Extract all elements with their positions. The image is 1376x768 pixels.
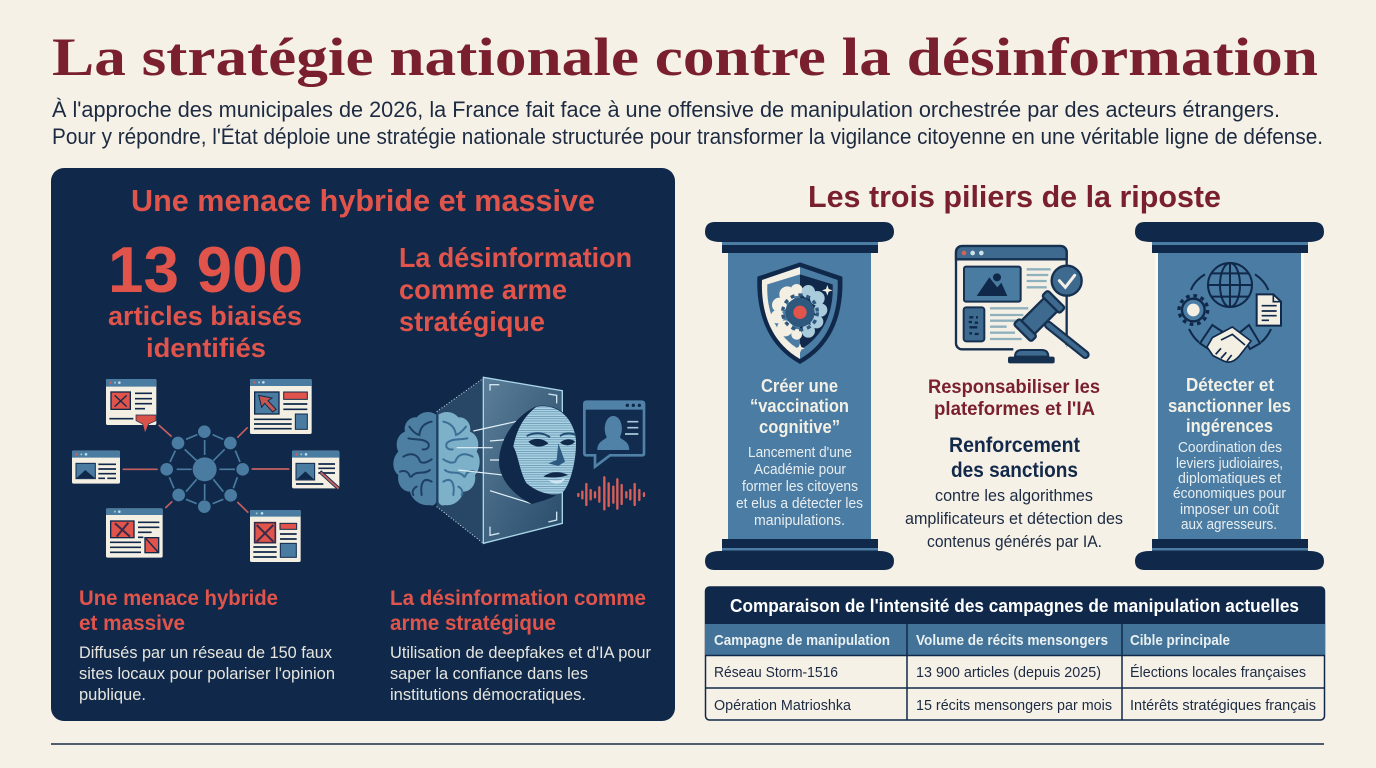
text: arme stratégique: arme stratégique [390, 612, 556, 635]
pillar 3 text: imposer un coût [1180, 501, 1280, 518]
comparison table [705, 587, 1325, 720]
subheading: arme stratégique [399, 242, 632, 337]
key figure: 13 900 articles [108, 233, 303, 363]
title: La stratégie nationale contre la désinformation [52, 27, 1318, 87]
text: arme stratégique: La désinformation comme [390, 587, 646, 610]
table header row: Campagne de manipulation [714, 632, 890, 649]
window D [292, 451, 339, 489]
pillar 3 text: diplomatiques et [1178, 470, 1282, 487]
panel heading: Une menace hybride et massive [131, 183, 595, 218]
pillar 2 emphasis: des sanctions [951, 459, 1078, 482]
pillar 1: vaccination cognitive [705, 222, 894, 570]
table title: Comparaison de l'intensité des campagnes de manipulation actuelles [730, 595, 1299, 616]
pillar 2 heading [928, 377, 1100, 420]
icon: globe gear document handshake [1179, 263, 1281, 362]
pillar 2 text: contenus générés par IA. [927, 532, 1102, 551]
text: arme stratégique: saper la confiance dans les [390, 664, 588, 683]
pillar 3 text: Détecter et [1186, 375, 1274, 395]
table row: Storm-1516: 13 900 articles (depuis 2025) [916, 664, 1101, 681]
table row: Matrioshka: 15 récits mensongers par mois [916, 697, 1112, 714]
pillar 3 text: ingérences [1186, 416, 1273, 436]
text: menace hybride: Une menace hybride [79, 587, 278, 610]
pillar 2: responsabiliser [905, 246, 1123, 551]
pillar 3 text: économiques pour [1173, 485, 1286, 502]
text: arme stratégique: institutions démocratiques. [390, 685, 586, 704]
icon: deepfake brain and face [393, 377, 644, 543]
intro text: Pour y répondre, l'État déploie une stratégie nationale structurée pour transformer la vigilance citoyenne en une véritable ligne de défense. [52, 124, 1323, 149]
subheading: arme stratégique: comme arme [399, 274, 567, 305]
window B [250, 379, 312, 434]
intro text: À l'approche des municipales de 2026, la France fait face à une offensive de manipulation orchestrée par des acteurs étrangers. [52, 97, 1280, 122]
pillar 1 text: manipulations. [754, 512, 845, 529]
pillar 1 text: former les citoyens [742, 478, 858, 495]
pillar 2 text: amplificateurs et détection des [905, 509, 1123, 528]
sound wave [578, 477, 644, 509]
pillar 2 heading: Responsabiliser les [928, 377, 1100, 398]
pillar 2 heading: plateformes et l'IA [934, 399, 1095, 420]
icon: web page and gavel [956, 246, 1085, 363]
table row: Matrioshka [714, 697, 1316, 714]
heading: trois piliers: Les trois piliers de la riposte [808, 179, 1221, 214]
text: arme stratégique [390, 587, 651, 704]
pillar 1 text: Créer une [761, 376, 838, 396]
window C [72, 451, 120, 484]
pillar 3 text [1168, 375, 1291, 533]
pillar 3: détecter et sanctionner [1135, 222, 1324, 570]
pillar 3 text: Coordination des [1178, 439, 1282, 456]
pillar 1 text: “vaccination [750, 396, 849, 416]
table header row: Cible principale [1130, 632, 1230, 649]
subheading: arme stratégique: stratégique [399, 306, 545, 337]
text: menace hybride: et massive [79, 612, 185, 635]
pillar 2 text [905, 486, 1123, 551]
pillar 1 text: Lancement d'une [748, 444, 852, 461]
window A [106, 379, 156, 433]
table row: Storm-1516: Élections locales françaises [1130, 664, 1306, 681]
text: menace hybride: Diffusés par un réseau de 150 faux [79, 643, 332, 662]
table row: Matrioshka: Intérêts stratégiques français [1130, 697, 1316, 714]
window E [106, 508, 163, 558]
synthetic face [499, 406, 576, 504]
key figure: 13 900 articles: 13 900 [108, 233, 303, 306]
table header row: Volume de récits mensongers [916, 632, 1108, 649]
translucent scan plane [483, 377, 562, 543]
pillar 1 text: Académie pour [754, 461, 846, 478]
pillar 2 emphasis: Renforcement [949, 434, 1080, 457]
table row: Matrioshka: Opération Matrioshka [714, 697, 852, 714]
icon: brain shield [757, 262, 842, 364]
panel: menace hybride [51, 168, 675, 721]
pillar 1 text: cognitive” [759, 417, 840, 437]
window F [250, 510, 301, 562]
text: menace hybride [79, 587, 335, 704]
text: menace hybride: sites locaux pour polariser l'opinion [79, 664, 335, 683]
key figure: 13 900 articles: identifiés [146, 333, 266, 363]
pillar 1 text: et elus a détecter les [736, 495, 863, 512]
subheading: arme stratégique: La désinformation [399, 242, 632, 273]
pillar 3 text: leviers judioiaires, [1176, 455, 1283, 472]
key figure: 13 900 articles: articles biaisés [108, 301, 302, 331]
icon: network of fake sites [72, 379, 339, 562]
text: menace hybride: publique. [79, 685, 146, 704]
chat bubble profile [584, 402, 644, 467]
table row: Storm-1516: Réseau Storm-1516 [714, 664, 838, 681]
pillar 2 text: contre les algorithmes [935, 486, 1093, 505]
table header row [714, 632, 1230, 649]
pillar 3 text: aux agresseurs. [1181, 516, 1277, 533]
intro text [52, 97, 1323, 149]
pillar 1 text [736, 376, 863, 529]
brain [393, 412, 480, 505]
pillar 3 text: sanctionner les [1168, 396, 1291, 416]
table row: Storm-1516 [714, 664, 1306, 681]
pillar 2 emphasis [949, 434, 1080, 482]
text: arme stratégique: Utilisation de deepfakes et d'IA pour [390, 643, 651, 662]
